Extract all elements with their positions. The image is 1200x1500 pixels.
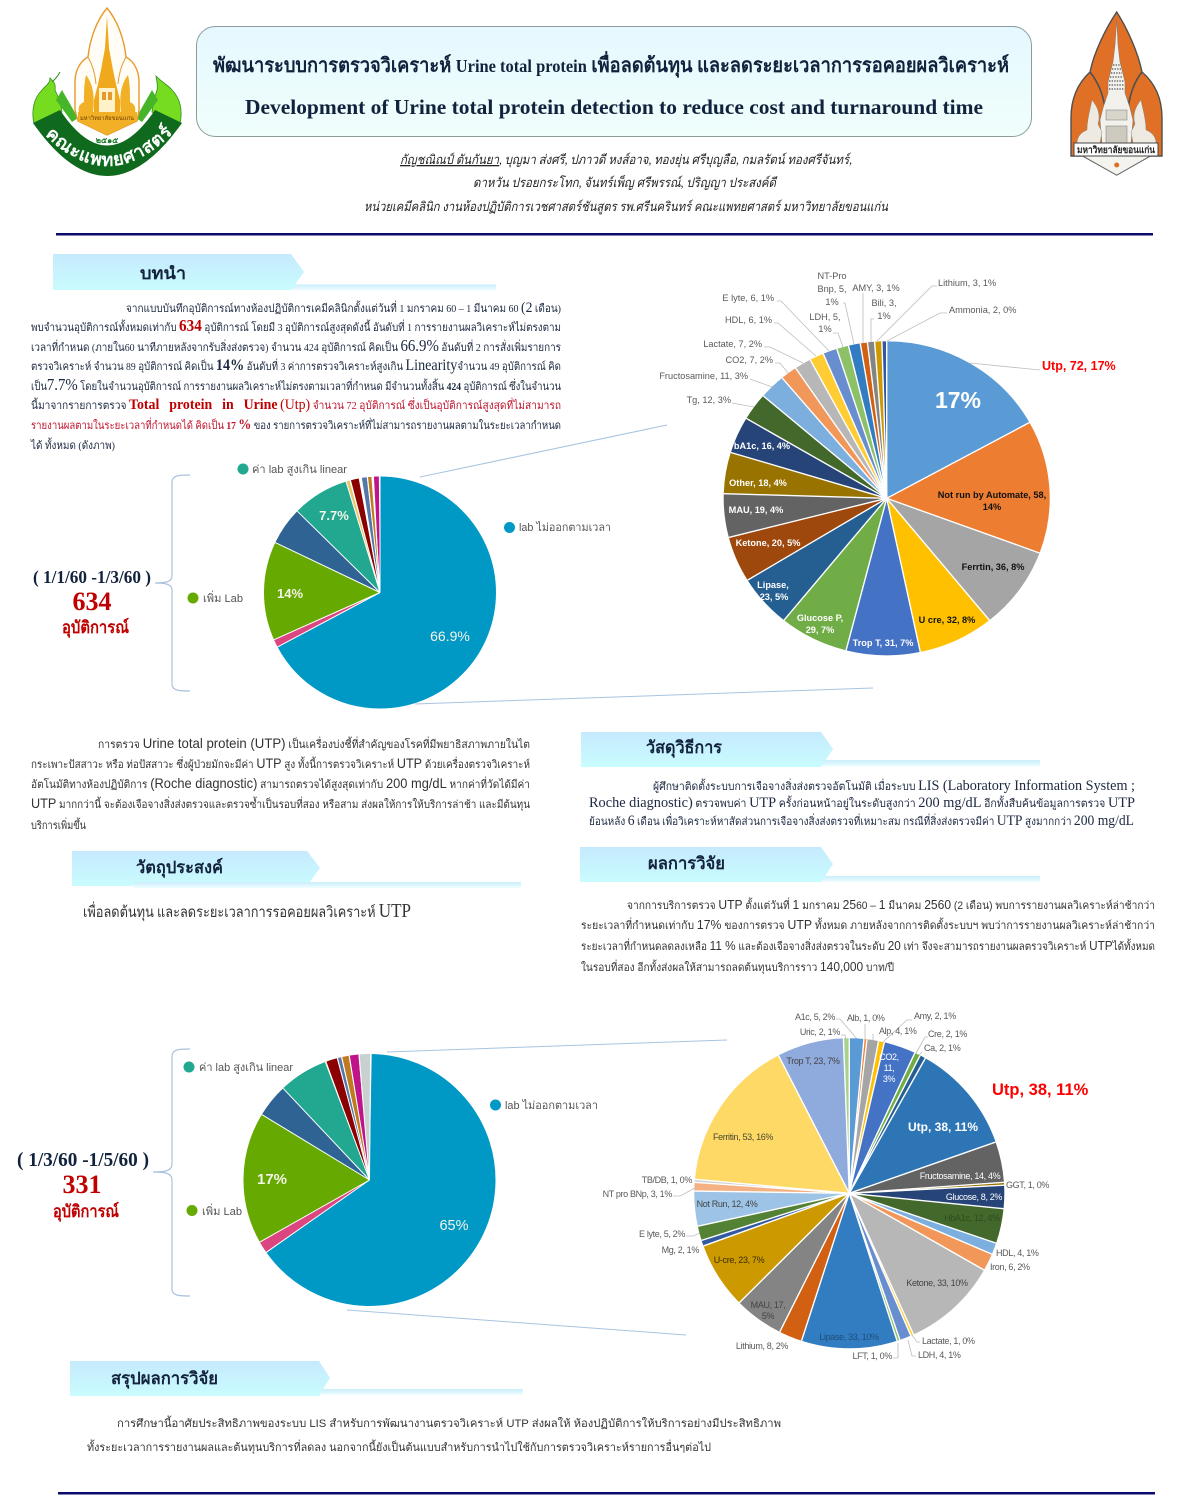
data labels: Mg, 2, 1% (662, 1245, 699, 1255)
logo: Faculty of Medicine emblem: ๒๕๑๕ (96, 136, 118, 145)
text block: methods: ย้อนหลัง 6 เดือน เพื่อวิเคราะห์หาสัดส่วนการเจือจางสิ่งส่งตรวจที่เหมาะสม กรณีที่สิ่งส่งตรวจมีค่า UTP สูงมากกว่า 200 mg/dL (589, 813, 1134, 829)
data labels: Ketone, 33, 10% (906, 1278, 968, 1288)
text block: conclusion: ทั้งระยะเวลาการรายงานผลและต้นทุนบริการที่ลดลง นอกจากนี้ยังเป็นต้นแบบสำหรับการนำไปใช้กับการตรวจวิเคราะห์รายการอื่นๆต่อไป (87, 1439, 711, 1454)
data labels: Fructosamine, 14, 4% (920, 1171, 1001, 1181)
data labels: Bnp, 5, (817, 284, 847, 294)
period label: 1/1/60 - 1/3/60, 634 incidents: อุบัติการณ์ (62, 617, 129, 638)
text block: results: จากการบริการตรวจ UTP ตั้งแต่วันที่ 1 มกราคม 2560 – 1 มีนาคม 2560 (2 เดือน) พบการรายงานผลวิเคราะห์ล่าช้ากว่า (627, 897, 1155, 912)
data labels: Fructosamine, 11, 3% (659, 371, 748, 381)
data labels: MAU, 19, 4% (729, 505, 783, 515)
data labels (603, 1011, 1089, 1361)
pie chart: late UTP test breakdown Mar-May (603, 1011, 1089, 1361)
period label: 1/1/60 - 1/3/60, 634 incidents: 634 (72, 587, 112, 616)
text block: objective: เพื่อลดต้นทุน และลดระยะเวลาการรอคอยผลวิเคราะห์ UTP (83, 900, 411, 922)
data labels: CO2, 7, 2% (726, 355, 773, 365)
data labels: 1% (825, 297, 839, 307)
section heading: objective: วัตถุประสงค์ (136, 857, 223, 878)
pie percentage labels: 17% (257, 1171, 287, 1188)
section heading: introduction: บทนำ (140, 264, 186, 283)
logo: Faculty of Medicine emblem: มหาวิทยาลัยขอนแก่น (80, 115, 134, 122)
data labels: 11, (884, 1063, 894, 1073)
brace: first period (155, 475, 190, 691)
text block: introduction paragraph: พบจำนวนอุบัติการณ์ทั้งหมดเท่ากับ 634 อุบัติการณ์ โดยมี 3 อุบัติการณ์สูงสุดดังนี้ อันดับที่ 1 การรายงานผลวิเคราะห์ไม่ตรงตาม (31, 316, 561, 335)
connector lines: second pies (347, 1040, 727, 1335)
section heading: methods: วัสดุวิธีการ (646, 737, 723, 758)
data labels: bA1c, 16, 4% (734, 441, 790, 451)
data labels: TB/DB, 1, 0% (642, 1175, 692, 1185)
section heading: results: ผลการวิจัย (648, 854, 725, 873)
text block: methods: Roche diagnostic) ตรวจพบค่า UTP ครั้งก่อนหน้าอยู่ในระดับสูงกว่า 200 mg/dL อีกทั้งสืบค้นข้อมูลการตรวจ UTP (589, 795, 1135, 811)
data labels: 14% (983, 502, 1001, 512)
period label: 1/3/60 - 1/5/60, 331 incidents: 331 (62, 1170, 102, 1199)
pie percentage labels: 66.9% (430, 628, 470, 644)
data labels: LDH, 4, 1% (918, 1350, 961, 1360)
data labels: Lactate, 1, 0% (922, 1336, 975, 1346)
data labels: Utp, 72, 17% (1042, 359, 1116, 373)
data labels: 29, 7% (806, 625, 834, 635)
text block: methods (589, 778, 1135, 829)
text block: introduction paragraph: ตรวจวิเคราะห์ จำนวน 89 อุบัติการณ์ คิดเป็น 14% อันดับที่ 3 ค่าการตรวจวิเคราะห์สูงเกิน Linearityจำนวน 49 อุบัติการณ์ คิด (31, 357, 561, 374)
data labels: 17% (935, 387, 981, 413)
data labels: Iron, 6, 2% (990, 1262, 1030, 1272)
authors and affiliation: ดาหวัน ปรอยกระโทก, จันทร์เพ็ญ ศรีพรรณ์, ปริญญา ประสงค์ดี (473, 174, 778, 190)
logo: Khon Kaen University emblem: มหาวิทยาลัยขอนแก่น (1077, 145, 1155, 156)
data labels: Ammonia, 2, 0% (949, 305, 1016, 315)
text block: UTP background paragraph: กระเพาะปัสสาวะ หรือ ท่อปัสสาวะ ซึ่งผู้ป่วยมักจะมีค่า UTP สูง ทั้งนี้การตรวจวิเคราะห์ UTP ด้วยเครื่องตรวจวิเคราะห์ (31, 755, 530, 771)
text block: introduction paragraph: เวลาที่กำหนด (ภายใน60 นาทีภายหลังจากรับสิ่งส่งตรวจ) จำนวน 424 อุบัติการณ์ คิดเป็น 66.9% อันดับที่ 2 การสั่งเพิ่มรายการ (31, 336, 561, 355)
pie slices (274, 476, 462, 675)
data labels: Lactate, 7, 2% (703, 339, 762, 349)
pie percentage labels (277, 508, 470, 644)
Thai title: พัฒนาระบบการตรวจวิเคราะห์ Urine total protein เพื่อลดต้นทุน และลดระยะเวลาการรอคอยผลวิเคราะห์ (213, 50, 1009, 78)
leader lines (732, 286, 1040, 407)
pie percentage labels (257, 1171, 469, 1234)
data labels: 1% (877, 311, 891, 321)
data labels: Cre, 2, 1% (928, 1029, 967, 1039)
text block: UTP background paragraph: บริการเพิ่มขึ้น (31, 817, 86, 832)
data labels: U cre, 32, 8% (919, 615, 975, 625)
data labels: Alp, 4, 1% (879, 1026, 917, 1036)
authors and affiliation (364, 152, 889, 215)
authors and affiliation: หน่วยเคมีคลินิก งานห้องปฏิบัติการเวชศาสตร์ชันสูตร รพ.ศรีนครินทร์ คณะแพทยศาสตร์ มหาวิทยาลัยขอนแก่น (364, 199, 889, 215)
text block: results (581, 897, 1155, 974)
section heading: results (580, 847, 1040, 882)
authors and affiliation: กัญชณิณป์ ตันกันยา, บุญมา ส่งศรี, ปภาวดี หงส์อาจ, ทองยุ่น ศรีบุญลือ, กมลรัตน์ ทองศรีจันทร์, (400, 152, 852, 168)
English title: Development of Urine total protein detection to reduce cost and turnaround time (245, 95, 983, 119)
pie slices (694, 1038, 1004, 1341)
section heading: methods (581, 732, 1040, 767)
text block: conclusion (87, 1415, 781, 1454)
data labels: Utp, 38, 11% (908, 1120, 978, 1134)
data labels: 3% (883, 1074, 895, 1084)
text block: introduction paragraph: รายงานผลตามในระยะเวลาที่กำหนดได้ คิดเป็น 17 % ของ รายการตรวจวิเคราะห์ที่ไม่สามารถรายงานผลตามในระยะเวลากำหนด (31, 417, 561, 433)
legend: first pie: lab ไม่ออกตามเวลา (519, 521, 611, 534)
logo: Faculty of Medicine emblem (32, 7, 182, 176)
section heading: conclusion: สรุปผลการวิจัย (111, 1369, 218, 1389)
legend: first pie (188, 464, 611, 605)
text block: UTP background paragraph (31, 735, 530, 832)
data labels: E lyte, 5, 2% (639, 1229, 685, 1239)
data labels: Lipase, 33, 10% (819, 1332, 879, 1342)
text block: conclusion: การศึกษานี้อาศัยประสิทธิภาพของระบบ LIS สำหรับการพัฒนางานตรวจวิเคราะห์ UTP ส่งผลให้ ห้องปฏิบัติการให้บริการอย่างมีประสิทธิภาพ (117, 1415, 781, 1430)
data labels: MAU, 17, (751, 1300, 785, 1310)
legend: second pie: ค่า lab สูงเกิน linear (199, 1062, 293, 1074)
data labels: Utp, 38, 11% (992, 1081, 1089, 1099)
data labels: HbA1c, 12, 4% (944, 1213, 1000, 1223)
section heading: objective (72, 851, 521, 888)
data labels: Alb, 1, 0% (847, 1013, 885, 1023)
pie percentage labels: 7.7% (319, 508, 349, 523)
data labels: 23, 5% (760, 592, 788, 602)
data labels: Uric, 2, 1% (800, 1027, 840, 1037)
pie slices (724, 341, 1039, 652)
pie percentage labels: 65% (439, 1218, 469, 1234)
data labels: Other, 18, 4% (729, 478, 787, 488)
text block: introduction paragraph: นี้มาจากรายการตรวจ Total protein in Urine (Utp) จำนวน 72 อุบัติการณ์ ซึ่งเป็นอุบัติการณ์สูงสุดที่ไม่สามารถ (31, 397, 561, 413)
data labels: Tg, 12, 3% (687, 395, 731, 405)
logo: Khon Kaen University emblem (1071, 12, 1162, 175)
data labels: Not Run, 12, 4% (697, 1199, 758, 1209)
data labels: Glucose P, (797, 613, 843, 623)
data labels: Lithium, 8, 2% (736, 1341, 788, 1351)
text block: results: ในรอบที่สอง อีกทั้งส่งผลให้สามารถลดต้นทุนบริการราว 140,000 บาท/ปี (581, 959, 894, 974)
text block: UTP background paragraph: อัตโนมัติทางห้องปฏิบัติการ (Roche diagnostic) สามารถตรวจได้สูงสุดเท่ากับ 200 mg/dL หากค่าที่วัดได้มีค่า (31, 775, 530, 791)
legend: second pie: lab ไม่ออกตามเวลา (505, 1099, 598, 1112)
pie percentage labels: 14% (277, 586, 303, 601)
data labels: Ketone, 20, 5% (736, 538, 800, 548)
title box (196, 26, 1032, 136)
text block: methods: ผู้ศึกษาติดตั้งระบบการเจือจางสิ่งส่งตรวจอัตโนมัติ เมื่อระบบ LIS (Laboratory Information System ; (653, 778, 1135, 794)
text block: introduction paragraph (30, 300, 561, 452)
data labels: A1c, 5, 2% (795, 1012, 835, 1022)
data labels: Ca, 2, 1% (924, 1043, 961, 1053)
data labels: Lithium, 3, 1% (938, 278, 996, 288)
text block: introduction paragraph: เป็น7.7% โดยในจำนวนอุบัติการณ์ การรายงานผลวิเคราะห์ไม่ตรงตามเวลาที่กำหนด มีจำนวนทั้งสิ้น 424 อุบัติการณ์ ซึ่งในจำนวน (31, 375, 561, 394)
data labels: Not run by Automate, 58, (938, 490, 1046, 500)
legend: first pie: เพิ่ม Lab (203, 590, 243, 605)
period label: 1/3/60 - 1/5/60, 331 incidents: อุบัติการณ์ (53, 1201, 119, 1222)
data labels: Trop T, 23, 7% (786, 1056, 840, 1066)
pie chart: late UTP test breakdown Jan-Mar (659, 271, 1116, 652)
data labels: HDL, 6, 1% (725, 315, 772, 325)
data labels: LDH, 5, (809, 312, 841, 322)
pie chart: incident types Mar-May (257, 1054, 469, 1269)
text block: UTP background paragraph: การตรวจ Urine total protein (UTP) เป็นเครื่องบ่งชี้ที่สำคัญของโรคที่มีพยาธิสภาพภายในไต (98, 735, 530, 751)
text block: introduction paragraph: จากแบบบันทึกอุบัติการณ์ทางห้องปฏิบัติการเคมีคลินิกตั้งแต่วันที่ 1 มกราคม 60 – 1 มีนาคม 60 (2 เดือน) (126, 300, 561, 316)
data labels: GGT, 1, 0% (1006, 1180, 1049, 1190)
data labels: 1% (818, 324, 832, 334)
leader lines (673, 1019, 928, 1358)
period label: 1/1/60 - 1/3/60, 634 incidents: ( 1/1/60 -1/3/60 ) (33, 567, 151, 588)
data labels: CO2, (879, 1052, 899, 1062)
data labels: LFT, 1, 0% (852, 1351, 892, 1361)
text block: results: ระยะเวลาที่กำหนดลดลงเหลือ 11 % และต้องเจือจางสิ่งส่งตรวจในระดับ 20 เท่า จึงจะสามารถรายงานผลตรวจวิเคราะห์ UTPได้ทั้งหมด (581, 938, 1155, 953)
data labels: Bili, 3, (871, 298, 897, 308)
data labels: HDL, 4, 1% (996, 1248, 1039, 1258)
legend: second pie (184, 1062, 598, 1218)
data labels: E lyte, 6, 1% (722, 293, 774, 303)
connector lines: first pies (415, 425, 873, 704)
text block: introduction paragraph: ได้ ทั้งหมด (ดังภาพ) (30, 437, 115, 452)
period label: 1/3/60 - 1/5/60, 331 incidents (17, 1149, 149, 1222)
section heading: introduction (53, 254, 496, 290)
text block: results: ระยะเวลาที่กำหนดเท่ากับ 17% ของการตรวจ UTP ทั้งหมด ภายหลังจากการติดตั้งระบบฯ พบว่าการรายงานผลวิเคราะห์ล่าช้ากว่า (581, 917, 1155, 932)
legend: second pie: เพิ่ม Lab (202, 1203, 242, 1218)
data labels: Amy, 2, 1% (914, 1011, 956, 1021)
logo: Faculty of Medicine emblem: คณะแพทยศาสตร์ (46, 122, 172, 166)
data labels: Lipase, (757, 580, 789, 590)
data labels: AMY, 3, 1% (852, 283, 900, 293)
data labels: NT pro BNp, 3, 1% (603, 1189, 672, 1199)
data labels: Trop T, 31, 7% (853, 638, 913, 648)
data labels: U-cre, 23, 7% (714, 1255, 765, 1265)
section heading: conclusion (70, 1361, 523, 1396)
data labels (659, 271, 1116, 648)
data labels: 5% (762, 1311, 774, 1321)
pie chart: incident types Jan-Mar (274, 476, 470, 675)
legend: first pie: ค่า lab สูงเกิน linear (252, 464, 347, 476)
pie slices (260, 1054, 459, 1269)
data labels: Glucose, 8, 2% (946, 1192, 1002, 1202)
period label: 1/1/60 - 1/3/60, 634 incidents (33, 567, 151, 638)
brace: second period (153, 1049, 190, 1296)
text block: UTP background paragraph: UTP มากกว่านี้ จะต้องเจือจางสิ่งส่งตรวจและตรวจซ้ำเป็นรอบที่สอง หรือสาม ส่งผลให้การให้บริการล่าช้า และมีต้นทุน (31, 795, 530, 811)
period label: 1/3/60 - 1/5/60, 331 incidents: ( 1/3/60 -1/5/60 ) (17, 1149, 149, 1171)
data labels: Ferrtin, 36, 8% (962, 562, 1024, 572)
data labels: Ferritin, 53, 16% (713, 1132, 773, 1142)
data labels: NT-Pro (817, 271, 847, 281)
